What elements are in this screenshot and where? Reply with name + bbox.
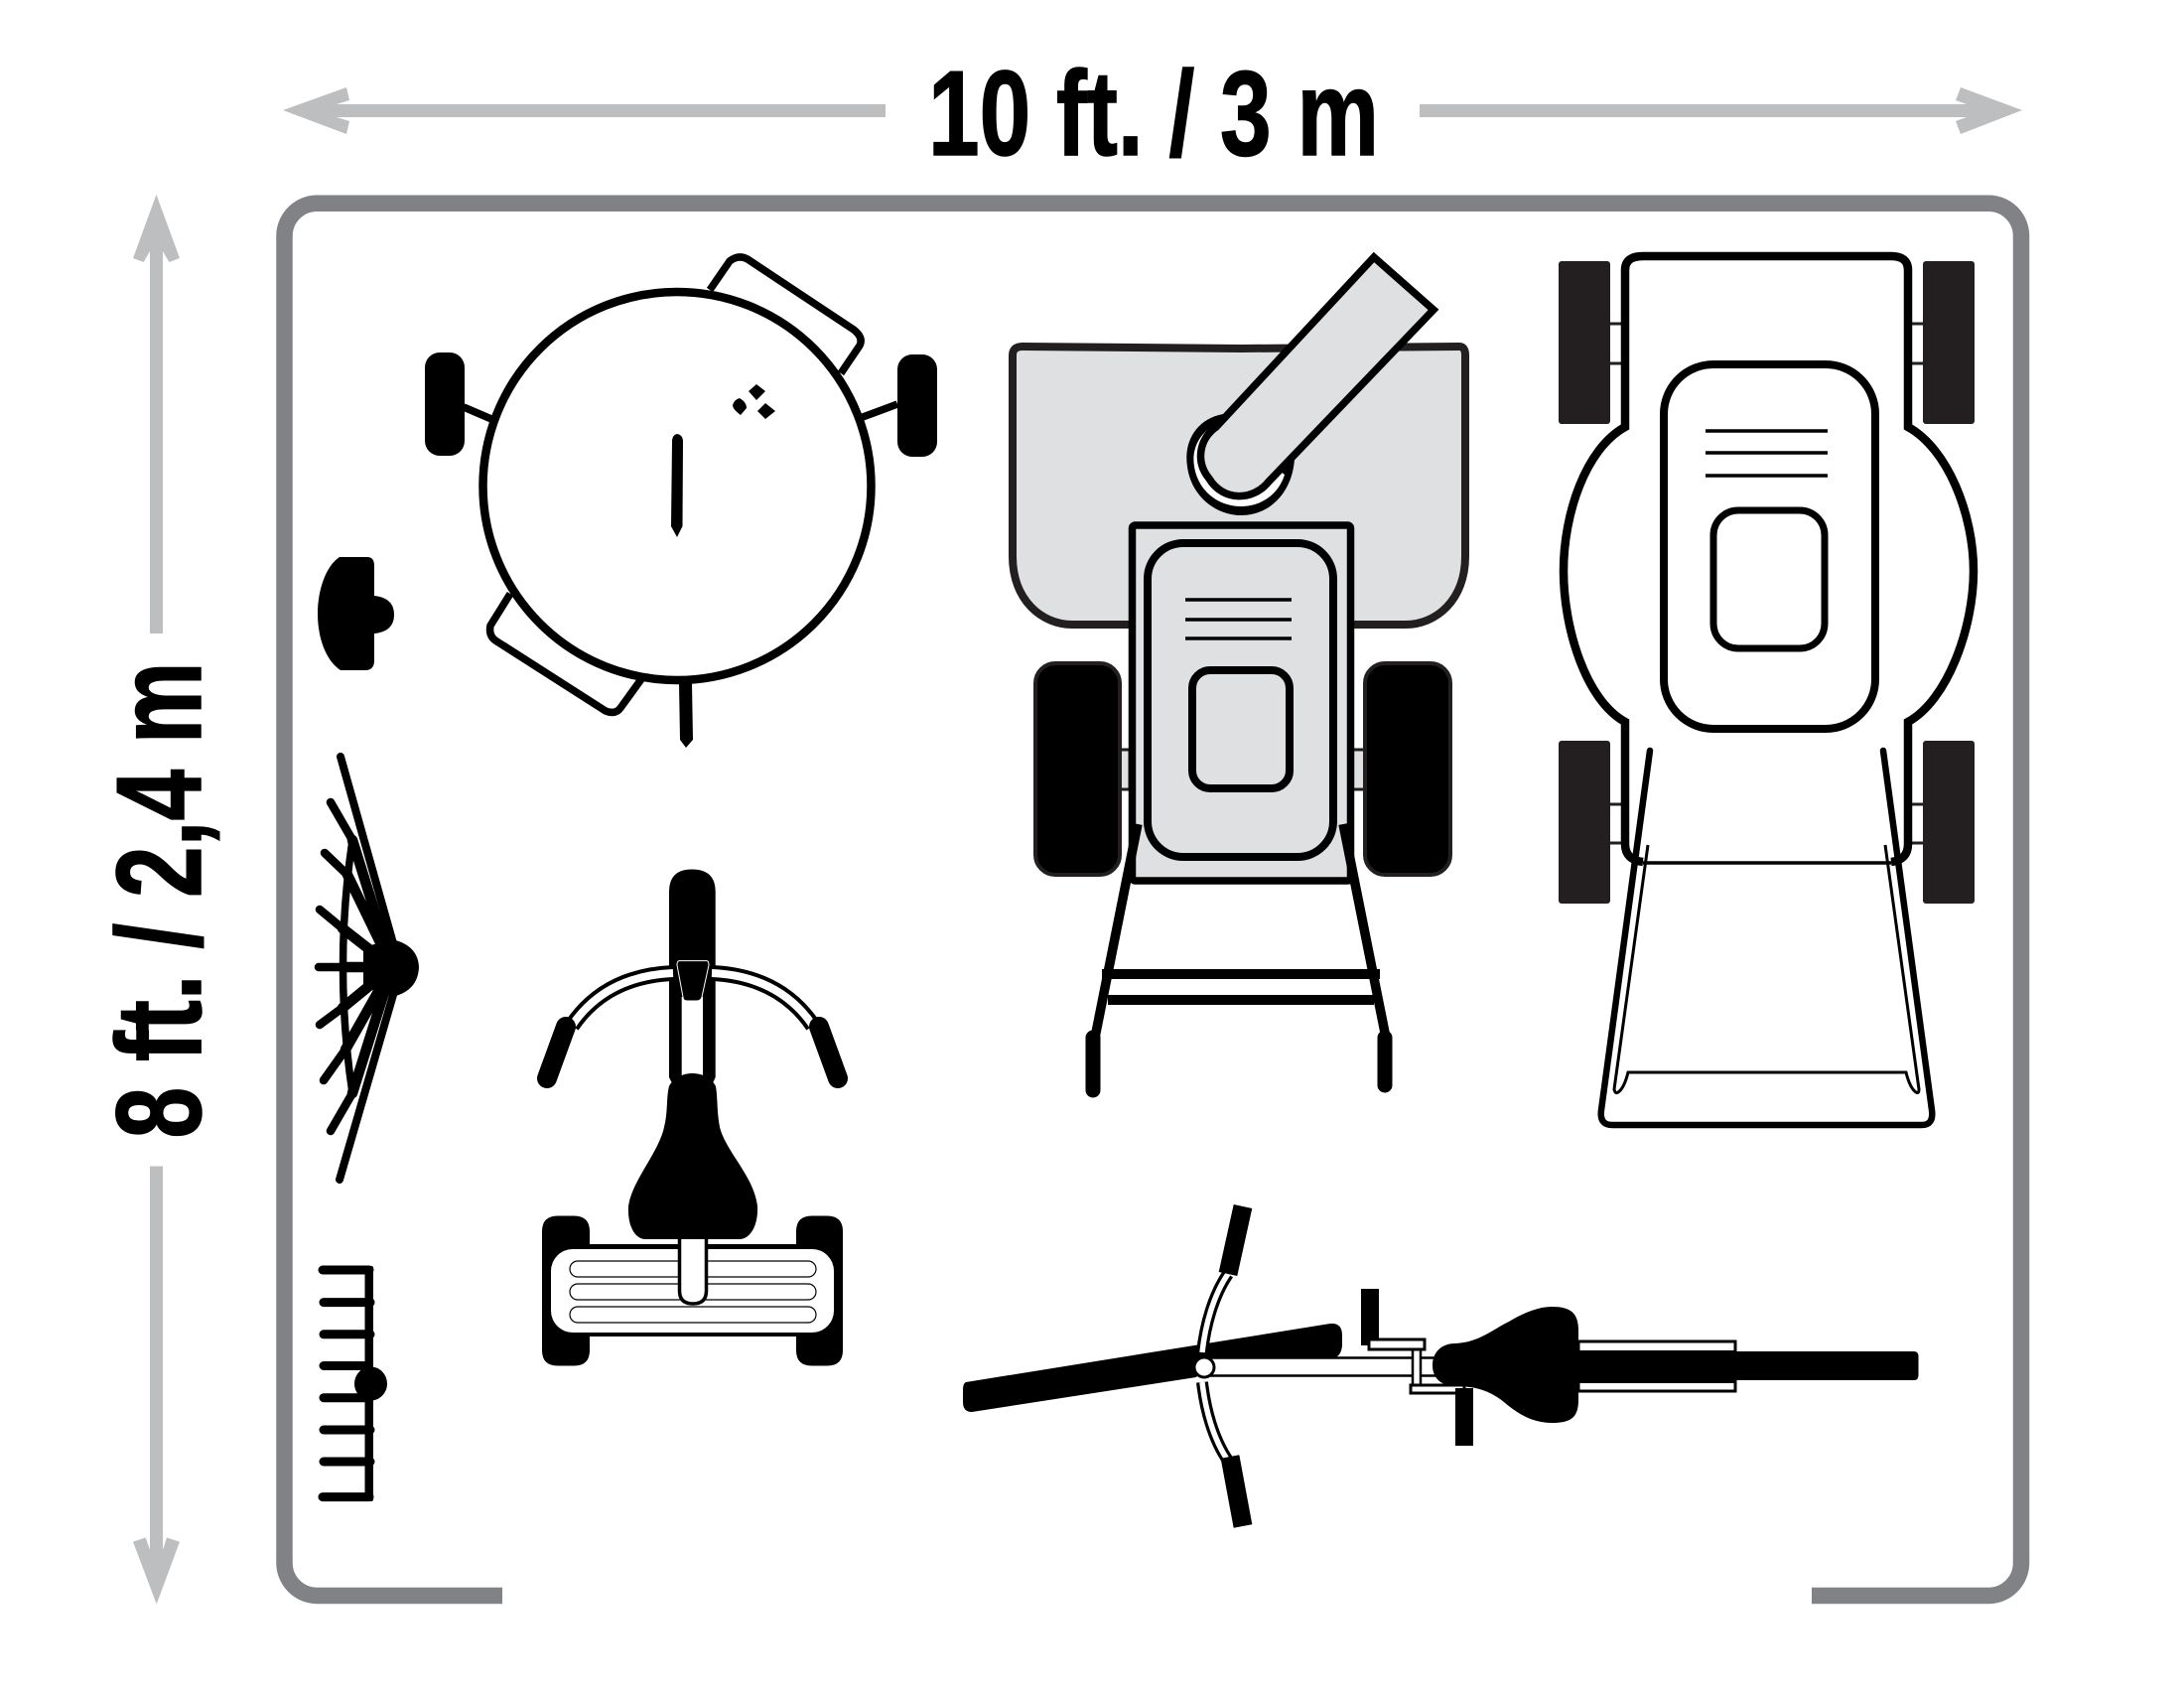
front wheel	[669, 870, 716, 1087]
arrow: height down	[133, 1166, 180, 1605]
garden rake spine	[365, 1266, 373, 1501]
axle left	[1117, 750, 1130, 789]
garden rake hub	[354, 1366, 387, 1400]
pedal arm bottom	[1455, 1388, 1473, 1446]
handle frame	[1095, 824, 1386, 1038]
mower deck	[1564, 256, 1974, 862]
grips	[1228, 1206, 1243, 1526]
mower engine cover	[1664, 364, 1875, 729]
deck	[551, 1249, 834, 1333]
mower vent lines	[1706, 431, 1828, 476]
heading: height label: 8 ft. / 2,4 m	[91, 661, 226, 1138]
fuel cap window	[1192, 670, 1290, 788]
icon: lawn mower	[1559, 256, 1975, 1125]
stem clamp	[677, 961, 709, 1001]
arrow: width right	[1420, 87, 2022, 134]
handle grips	[1093, 1038, 1385, 1090]
handlebar centre	[1202, 1274, 1228, 1461]
wheel left	[1035, 663, 1120, 875]
grill side table top	[710, 257, 861, 373]
icon: push reel mower / scooter	[542, 870, 843, 1366]
arrow: width left	[283, 87, 886, 134]
rake hub	[363, 939, 419, 997]
stem	[682, 997, 703, 1080]
height dimension: 8 ft / 2,4 m	[91, 195, 226, 1605]
icon: snow blower	[1013, 257, 1465, 1090]
chute base	[1186, 414, 1295, 515]
heading: width label: 10 ft. / 3 m	[928, 46, 1379, 181]
mower window	[1713, 510, 1825, 648]
engine body	[1132, 525, 1350, 881]
frame tube	[1209, 1358, 1439, 1376]
axle right	[1349, 750, 1368, 789]
icon: trowel head	[318, 557, 394, 670]
width dimension: 10 ft / 3 m	[283, 46, 2022, 181]
rake frame	[340, 757, 393, 1180]
rear wheels	[542, 1215, 843, 1366]
seat	[628, 1073, 757, 1239]
mower deck rear line	[1643, 861, 1891, 865]
chute	[1201, 257, 1433, 496]
grill vents	[733, 384, 775, 419]
deck backing	[586, 1244, 800, 1336]
icon: kettle grill	[425, 257, 937, 748]
auger housing	[1013, 347, 1465, 625]
chute ring	[1193, 423, 1285, 506]
storage floor outline	[284, 204, 2021, 1596]
mower wheels	[1559, 261, 1975, 904]
seat post	[679, 1239, 707, 1304]
icon: garden rake	[323, 1266, 387, 1501]
vent lines	[1185, 600, 1292, 638]
arrow: height up	[133, 195, 180, 633]
pedal arm top	[1361, 1289, 1379, 1345]
handlebar centres	[572, 973, 813, 1026]
mower axles	[1610, 324, 1923, 843]
garden rake tines	[323, 1270, 370, 1497]
pedal top	[1369, 1339, 1425, 1349]
engine cover	[1148, 543, 1333, 857]
rake spokes	[342, 840, 392, 1093]
handlebar	[1202, 1274, 1228, 1461]
grill side table bottom	[490, 594, 641, 712]
grill axles	[464, 404, 897, 419]
mower handle	[1601, 751, 1932, 1125]
deck slots	[570, 1261, 816, 1323]
grill wheel right	[897, 354, 937, 457]
icon: fan rake	[319, 757, 419, 1180]
grill leg	[679, 683, 693, 748]
mower handle inner	[1614, 845, 1919, 1093]
saddle	[1433, 1307, 1578, 1423]
rear rack	[1578, 1341, 1735, 1391]
grill wheel left	[425, 352, 465, 456]
rear wheel	[1578, 1350, 1918, 1383]
front wheel	[963, 1324, 1342, 1412]
handle crossbars	[1102, 974, 1380, 1000]
rake tine tips	[319, 802, 352, 1131]
grips	[547, 1027, 838, 1078]
icon: bicycle	[963, 1206, 1918, 1526]
head tube	[1194, 1357, 1214, 1377]
rake crossbar	[343, 840, 352, 1093]
handlebars	[572, 973, 813, 1026]
grill lid	[482, 292, 872, 680]
wheel right	[1365, 663, 1450, 875]
crank	[1413, 1348, 1421, 1385]
grill handle	[671, 434, 683, 537]
pedal bottom	[1411, 1385, 1464, 1393]
